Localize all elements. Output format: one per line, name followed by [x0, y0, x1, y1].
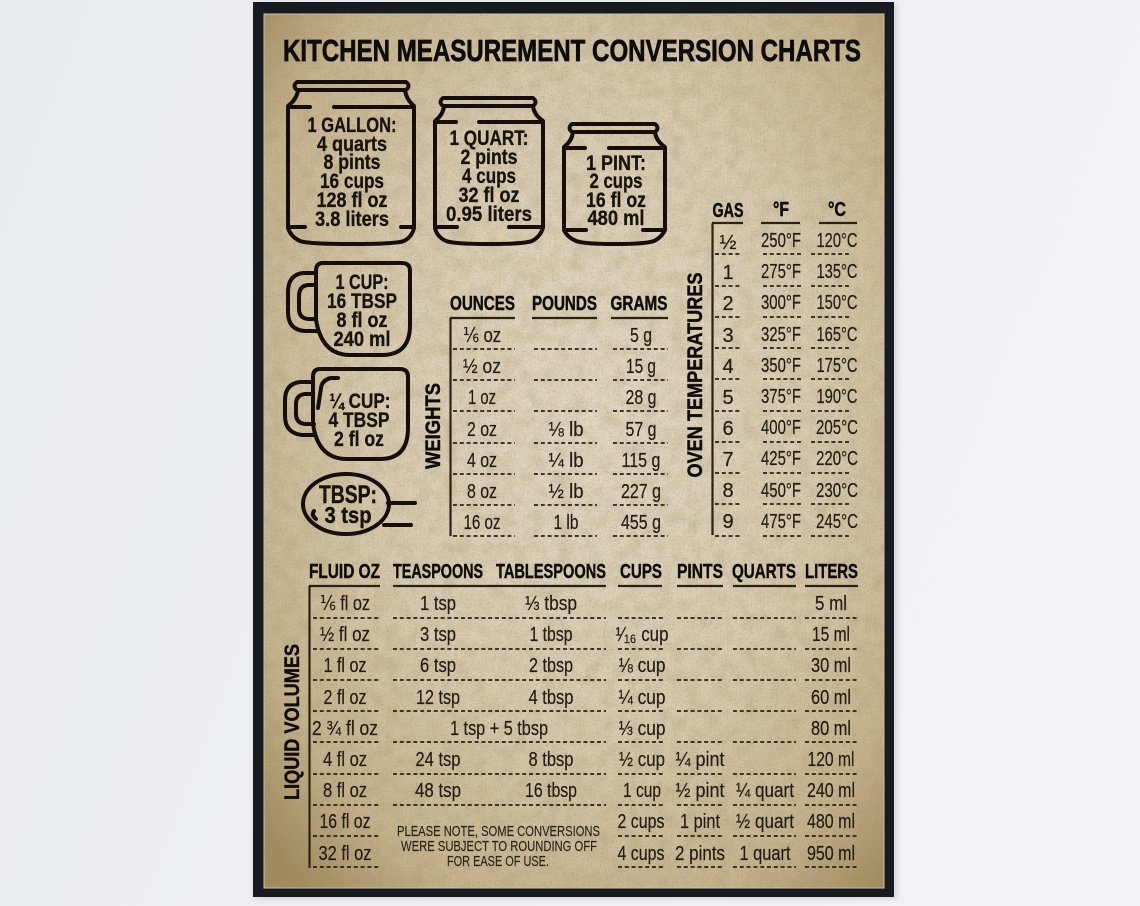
- grams column: 5 g: [630, 325, 652, 347]
- mug: quarter cup: [285, 369, 408, 459]
- jar text: quart: 4 cups: [462, 164, 516, 188]
- tablespoons column: 8 tbsp: [528, 749, 574, 771]
- teaspoons column: 1 tsp: [420, 593, 456, 615]
- liters column: 240 ml: [807, 780, 855, 802]
- pints column: ½ pint: [676, 780, 725, 802]
- rounding note: FOR EASE OF USE.: [447, 853, 549, 870]
- grams column: 227 g: [621, 481, 661, 503]
- liters column: 15 ml: [812, 624, 850, 646]
- ounces column: 2 oz: [467, 419, 497, 441]
- fluid oz column: 2 fl oz: [324, 687, 366, 709]
- jar text: gallon: 4 quarts: [317, 132, 387, 156]
- cups column: ¼ cup: [618, 687, 666, 709]
- ounces column: ⅙ oz: [463, 325, 501, 347]
- ounces column: 4 oz: [467, 450, 497, 472]
- fahrenheit column: 275°F: [761, 261, 801, 283]
- ounces column: 16 oz: [464, 512, 500, 534]
- jar text: quart: 2 pints: [460, 145, 518, 169]
- teaspoons column: 3 tsp: [420, 624, 456, 646]
- fahrenheit column: 475°F: [761, 511, 801, 533]
- rounding note: [397, 823, 600, 870]
- quarts column: 1 quart: [740, 843, 791, 865]
- pints column: 2 pints: [675, 843, 725, 865]
- weights label: WEIGHTS: [421, 383, 445, 469]
- oven headers: [712, 199, 846, 222]
- mug: 1 cup: [288, 263, 410, 355]
- oven headers: GAS: [712, 200, 744, 222]
- quarts column: ½ quart: [736, 811, 794, 833]
- cups column: [616, 624, 668, 865]
- fahrenheit column: 325°F: [761, 324, 801, 346]
- jar text: quart: 1 QUART:: [450, 126, 528, 150]
- jar text: gallon: 8 pints: [324, 150, 381, 174]
- grams column: 15 g: [626, 356, 656, 378]
- oven temperatures table: [683, 199, 858, 536]
- jar text: pint: 16 fl oz: [586, 188, 646, 212]
- rounding note: PLEASE NOTE, SOME CONVERSIONS: [397, 823, 600, 840]
- ounces column: 8 oz: [467, 481, 497, 503]
- cups column: 4 cups: [618, 843, 664, 865]
- tablespoons column: 2 tbsp: [529, 655, 573, 677]
- jar: 1 quart: [435, 98, 543, 244]
- gas column: 8: [722, 480, 734, 502]
- teaspoons column: 6 tsp: [420, 655, 456, 677]
- liquid headers: TABLESPOONS: [496, 561, 606, 583]
- gas column: 5: [722, 387, 734, 409]
- jar: 1 gallon: [288, 82, 414, 244]
- mug text: cup: 240 ml: [334, 327, 390, 351]
- poster frame: [253, 2, 894, 897]
- tablespoons column: [525, 593, 577, 802]
- liquid headers: LITERS: [805, 561, 858, 583]
- tablespoons column: ⅓ tbsp: [525, 593, 577, 615]
- liters column: 60 ml: [811, 687, 851, 709]
- celsius column: [816, 230, 858, 533]
- jar text: gallon: 128 fl oz: [316, 188, 388, 212]
- celsius column: 150°C: [816, 292, 858, 314]
- cups column: 2 cups: [618, 811, 664, 833]
- fahrenheit column: [761, 230, 801, 533]
- ounces column: [463, 325, 501, 534]
- fluid oz column: ½ fl oz: [320, 624, 370, 646]
- weights headers: POUNDS: [532, 293, 597, 315]
- jar text: pint: 1 PINT:: [586, 151, 646, 175]
- cups column: ¹⁄₁₆ cup: [616, 624, 668, 646]
- pints column: ¼ pint: [676, 749, 725, 771]
- jar text: pint: [586, 151, 646, 230]
- gas column: 7: [722, 449, 734, 471]
- fluid oz column: 32 fl oz: [318, 843, 372, 865]
- mug text: quarter cup: ¼ CUP:: [330, 389, 390, 413]
- tablespoons column: 1 tbsp: [530, 624, 572, 646]
- liquid headers: CUPS: [620, 561, 662, 583]
- celsius column: 175°C: [816, 355, 858, 377]
- liters column: 950 ml: [807, 843, 855, 865]
- grams column: 28 g: [626, 387, 656, 409]
- liters column: 120 ml: [808, 749, 854, 771]
- jar text: quart: [446, 126, 532, 226]
- gas column: 3: [722, 325, 734, 347]
- mug text: quarter cup: 4 TBSP: [328, 408, 390, 432]
- cups column: ½ cup: [619, 749, 665, 771]
- pounds column: ⅛ lb: [548, 419, 584, 441]
- liquid headers: TEASPOONS: [393, 561, 483, 583]
- cups column: 1 cup: [623, 780, 661, 802]
- liters column: 5 ml: [815, 593, 847, 615]
- celsius column: 230°C: [816, 480, 858, 502]
- tablespoons column: 4 tbsp: [528, 687, 574, 709]
- quarts column: ¼ quart: [736, 780, 794, 802]
- liquid headers: PINTS: [677, 561, 723, 583]
- spoon: tablespoon: [303, 474, 415, 534]
- paper speckle: [264, 14, 884, 888]
- mug text: cup: 1 CUP:: [336, 270, 388, 294]
- spoon text: 3 tsp: [324, 502, 372, 528]
- fahrenheit column: 250°F: [761, 230, 801, 252]
- celsius column: 135°C: [816, 261, 858, 283]
- quarts column: [736, 780, 794, 865]
- pounds column: 1 lb: [554, 512, 578, 534]
- frame shadow: [255, 4, 897, 899]
- teaspoons column: 48 tsp: [415, 780, 461, 802]
- fluid oz column: ⅙ fl oz: [320, 593, 370, 615]
- gas column: 1: [722, 262, 734, 284]
- mug text: cup: [327, 270, 397, 351]
- grams column: 57 g: [626, 419, 656, 441]
- fluid oz column: 2 ¾ fl oz: [312, 718, 378, 740]
- teaspoons column: [415, 593, 548, 802]
- liters column: 480 ml: [807, 811, 855, 833]
- fluid oz column: 1 fl oz: [324, 655, 366, 677]
- paper texture: [264, 14, 884, 888]
- liquid volumes table: [280, 561, 858, 870]
- jar text: gallon: 3.8 liters: [315, 207, 389, 231]
- liters column: 30 ml: [811, 655, 851, 677]
- celsius column: 220°C: [816, 448, 858, 470]
- teaspoons column: 12 tsp: [416, 687, 460, 709]
- liquid headers: FLUID OZ: [309, 561, 380, 583]
- pints column: 1 pint: [680, 811, 720, 833]
- celsius column: 245°C: [816, 511, 858, 533]
- liquid headers: [309, 561, 858, 583]
- fahrenheit column: 450°F: [761, 480, 801, 502]
- oven label: OVEN TEMPERATURES: [683, 272, 707, 478]
- gas column: [720, 232, 737, 533]
- rounding note: WERE SUBJECT TO ROUNDING OFF: [401, 838, 597, 855]
- fahrenheit column: 300°F: [761, 292, 801, 314]
- mug text: cup: 8 fl oz: [336, 308, 388, 332]
- ounces column: ½ oz: [463, 356, 501, 378]
- grams column: [621, 325, 661, 534]
- grams column: 455 g: [621, 512, 661, 534]
- weights headers: GRAMS: [610, 293, 668, 315]
- liters column: 80 ml: [811, 718, 851, 740]
- oven headers: °F: [773, 199, 789, 221]
- gas column: 4: [722, 356, 734, 378]
- weights headers: [450, 293, 668, 315]
- cups column: ⅓ cup: [618, 718, 666, 740]
- fluid oz column: 16 fl oz: [320, 811, 370, 833]
- oven headers: °C: [828, 199, 846, 221]
- pounds column: ½ lb: [548, 481, 584, 503]
- celsius column: 165°C: [816, 324, 858, 346]
- celsius column: 205°C: [816, 417, 858, 439]
- spoon text: TBSP:: [319, 481, 377, 509]
- jar text: quart: 0.95 liters: [446, 202, 532, 226]
- grams column: 115 g: [622, 450, 660, 472]
- gas column: 6: [722, 418, 734, 440]
- gas column: 2: [722, 293, 734, 315]
- pints column: [675, 749, 725, 865]
- pounds column: [548, 419, 584, 534]
- pounds column: ¼ lb: [548, 450, 584, 472]
- liters column: [807, 593, 855, 865]
- cups column: ⅛ cup: [618, 655, 666, 677]
- jar text: gallon: [308, 113, 396, 231]
- ounces column: 1 oz: [468, 387, 496, 409]
- fluid oz column: [312, 593, 378, 865]
- fluid oz column: 4 fl oz: [323, 749, 367, 771]
- fahrenheit column: 425°F: [761, 448, 801, 470]
- teaspoons column: 1 tsp + 5 tbsp: [450, 718, 548, 740]
- title: KITCHEN MEASUREMENT CONVERSION CHARTS: [283, 33, 861, 68]
- parchment paper: [264, 14, 884, 888]
- tablespoons column: 16 tbsp: [525, 780, 577, 802]
- teaspoons column: 24 tsp: [416, 749, 460, 771]
- spoon text: [319, 481, 377, 528]
- fahrenheit column: 375°F: [761, 386, 801, 408]
- jar: 1 pint: [564, 124, 665, 244]
- fahrenheit column: 400°F: [761, 417, 801, 439]
- gas column: 9: [722, 511, 734, 533]
- celsius column: 190°C: [816, 386, 858, 408]
- jar text: gallon: 1 GALLON:: [308, 113, 396, 137]
- liquid label: LIQUID VOLUMES: [280, 644, 304, 800]
- weights headers: OUNCES: [450, 293, 515, 315]
- mug text: quarter cup: [328, 389, 390, 451]
- jar text: pint: 2 cups: [590, 169, 643, 193]
- jar text: pint: 480 ml: [588, 206, 644, 230]
- weights table: [421, 293, 668, 536]
- mug text: cup: 16 TBSP: [327, 289, 397, 313]
- jar text: gallon: 16 cups: [320, 169, 384, 193]
- fahrenheit column: 350°F: [761, 355, 801, 377]
- liquid headers: QUARTS: [732, 561, 796, 583]
- celsius column: 120°C: [816, 230, 858, 252]
- mug text: quarter cup: 2 fl oz: [334, 427, 384, 451]
- fluid oz column: 8 fl oz: [323, 780, 367, 802]
- jar text: quart: 32 fl oz: [458, 183, 520, 207]
- gas column: ½: [720, 232, 737, 254]
